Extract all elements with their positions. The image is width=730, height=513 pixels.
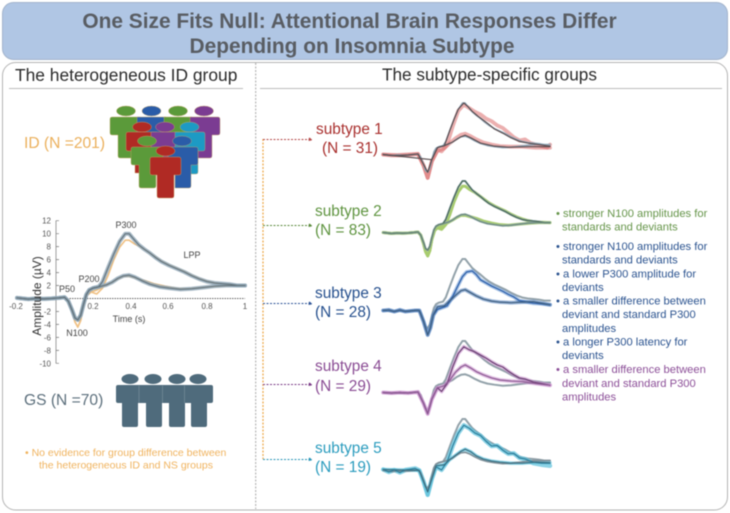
label: subtype 5 — [315, 440, 382, 457]
ERP traces — [383, 181, 550, 256]
subtype 3 findings: deviant and standard P300 — [562, 309, 696, 321]
axis titles and peak labels — [30, 220, 201, 338]
y axis: 6 — [47, 256, 52, 264]
panel: subtype-specific groups — [260, 64, 722, 495]
connector trunk — [262, 139, 264, 459]
GS group label: GS (N =70) — [24, 392, 103, 409]
label: (N = 83) — [315, 222, 371, 239]
subtype 3 findings: • a lower P300 amplitude for — [556, 268, 696, 280]
note: no group difference: the heterogeneous ID and NS groups — [39, 460, 213, 472]
y axis: -6 — [44, 334, 52, 342]
x axis — [9, 298, 248, 311]
connector — [263, 383, 312, 386]
y axis: 10 — [42, 230, 52, 238]
subtype 3 findings: deviants — [562, 282, 604, 294]
label: subtype 2 — [315, 203, 382, 220]
label: (N = 31) — [322, 140, 378, 157]
label: (N = 28) — [315, 304, 371, 321]
divider between panels — [255, 63, 257, 509]
connector — [263, 302, 312, 305]
axis titles and peak labels: P50 — [59, 284, 75, 294]
y axis — [39, 216, 59, 368]
y axis: -4 — [44, 320, 52, 330]
ERP traces — [383, 259, 550, 335]
subtype 2 row — [263, 181, 550, 256]
subtype 3 findings: • a smaller difference between — [556, 296, 706, 308]
x axis: 0.6 — [162, 302, 174, 311]
ERP traces — [383, 341, 550, 414]
right heading: The subtype-specific groups — [382, 64, 597, 84]
ERP traces — [383, 103, 550, 178]
ERP traces — [383, 419, 550, 495]
axis titles and peak labels: Time (s) — [113, 314, 145, 324]
connector — [263, 224, 312, 227]
label: subtype 3 — [315, 285, 382, 302]
x axis: -0.2 — [9, 302, 23, 311]
axis titles and peak labels: LPP — [183, 250, 201, 260]
y axis: 8 — [47, 242, 52, 252]
axis titles and peak labels: Amplitude (µV) — [30, 256, 44, 336]
left heading: The heterogeneous ID group — [15, 65, 237, 85]
title: Depending on Insomnia Subtype — [190, 35, 514, 58]
header banner — [2, 2, 728, 60]
label: subtype 1 — [316, 121, 383, 138]
subtype 1 row — [263, 103, 550, 178]
subtype 4 findings: • a smaller difference between — [556, 364, 706, 376]
subtype 3 findings: • stronger N100 amplitudes for — [556, 241, 708, 253]
x axis: 0.2 — [87, 302, 99, 311]
icon: ID crowd of people — [110, 106, 220, 198]
y axis: -8 — [44, 346, 52, 356]
y axis: 2 — [47, 282, 52, 290]
subtype 3 findings: standards and deviants — [562, 255, 678, 267]
connector — [263, 458, 312, 461]
panel: heterogeneous ID group — [9, 65, 248, 472]
subtype 5 row — [263, 419, 550, 495]
x axis: 0.4 — [125, 302, 137, 311]
subtype 3 row — [263, 259, 550, 335]
axis titles and peak labels: P300 — [115, 220, 137, 230]
y axis: 4 — [47, 268, 52, 278]
icon: GS people — [116, 374, 213, 427]
subtype 4 row — [263, 341, 550, 414]
subtype 3 findings: deviants — [562, 350, 604, 362]
y axis: 12 — [42, 216, 52, 226]
x axis: 0.8 — [201, 302, 213, 311]
axis titles and peak labels: P200 — [78, 274, 100, 284]
subtype 2 findings: • stronger N100 amplitudes for — [556, 208, 708, 220]
subtype 2 findings: standards and deviants — [562, 222, 678, 234]
x axis: 1 — [243, 302, 248, 311]
subtype 4 findings: deviant and standard P300 — [562, 378, 696, 390]
y axis: -10 — [39, 360, 52, 368]
label: (N = 29) — [315, 378, 371, 395]
subtype 3 findings: • a longer P300 latency for — [556, 336, 688, 348]
ERP traces — [17, 234, 245, 327]
axis titles and peak labels: N100 — [66, 328, 88, 338]
connector — [263, 138, 312, 141]
ID group label: ID (N =201) — [24, 135, 105, 152]
subtype 3 findings: amplitudes — [562, 323, 617, 335]
label: (N = 19) — [315, 459, 371, 476]
note: no group difference: • No evidence for group difference between — [25, 447, 227, 459]
y axis: -2 — [44, 308, 52, 316]
label: subtype 4 — [315, 358, 382, 375]
chart: grand average ERP — [9, 216, 248, 368]
title: One Size Fits Null: Attentional Brain Responses Differ — [82, 10, 617, 33]
subtype findings list — [556, 208, 708, 404]
subtype 4 findings: amplitudes — [562, 392, 617, 404]
